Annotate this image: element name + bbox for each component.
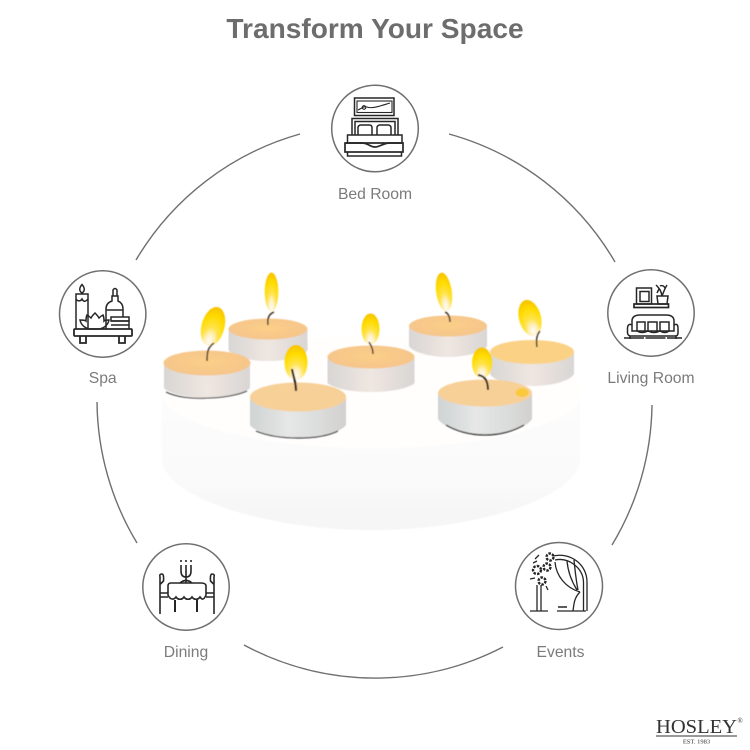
icon: spa tray (59, 271, 146, 357)
icon: dining table (143, 544, 229, 630)
candle front left (250, 345, 346, 438)
logo: Hosley: HOSLEY (656, 716, 737, 738)
label: Dining (164, 644, 208, 661)
label: Bed Room (338, 186, 412, 203)
Events item (516, 542, 602, 661)
Living Room item (607, 270, 695, 387)
label: Living Room (607, 370, 695, 387)
product: white round tealight holder with seven candles (162, 272, 582, 530)
holder base (162, 336, 582, 530)
label: Spa (89, 370, 117, 387)
logo: Hosley (656, 716, 744, 746)
icon: bed (332, 85, 418, 172)
icon: floral arch (516, 542, 602, 630)
ring of connecting arcs (97, 134, 652, 678)
logo: Hosley: ® (738, 717, 744, 725)
Spa item (59, 271, 146, 387)
label: Events (537, 644, 585, 661)
Dining item (143, 544, 229, 661)
candle left (164, 304, 250, 398)
candle front right (438, 348, 532, 435)
candle right (490, 297, 574, 386)
candle back right (409, 272, 487, 357)
title: Transform Your Space (226, 13, 524, 44)
icon: sofa and shelf (608, 270, 694, 356)
Bed Room item (332, 85, 418, 203)
candle middle (328, 314, 414, 392)
logo: Hosley: EST. 1983 (683, 738, 710, 746)
candle back left (228, 272, 308, 361)
